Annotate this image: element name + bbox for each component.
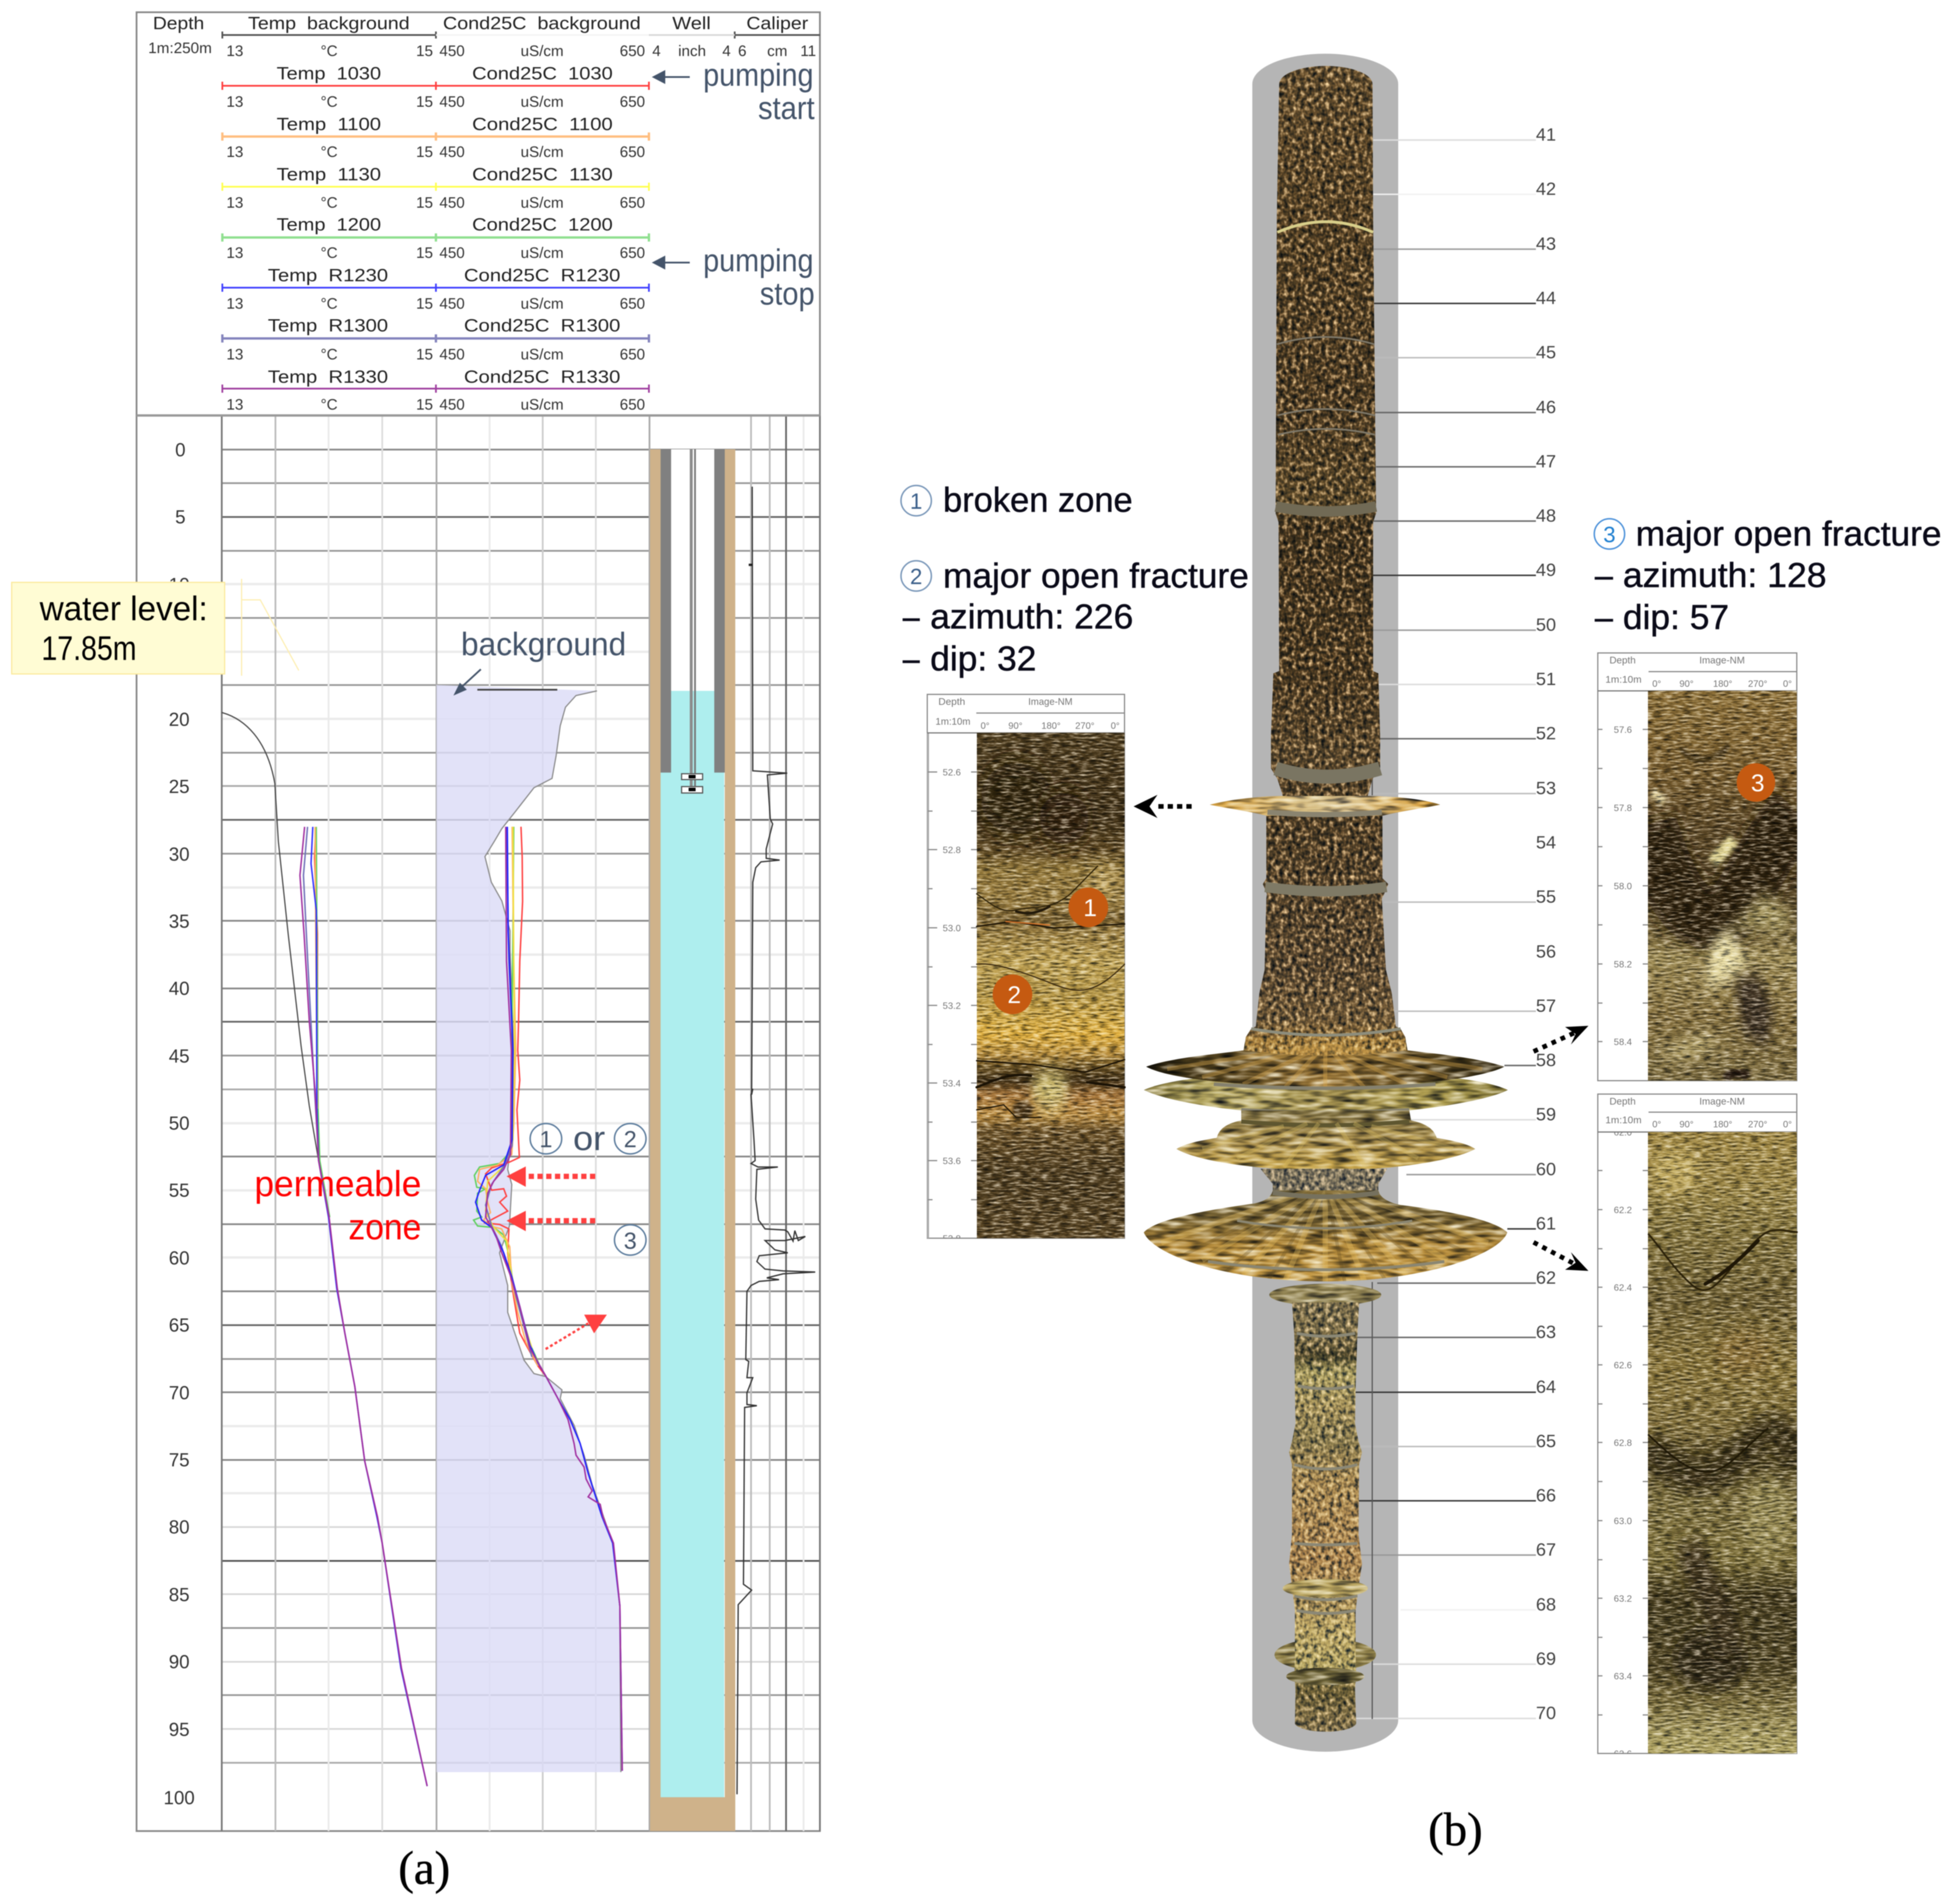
flange band [1245,1037,1406,1056]
depth ticks and labels [1598,725,1648,1047]
panel a: borehole log chart [12,12,820,1831]
legend: broken zone: 1 [910,490,923,514]
marker 2 [993,974,1032,1014]
annotation: 1 or 2: or [573,1120,605,1158]
header: scale rows and curve legend: 650 [620,295,645,312]
well diagram [650,449,735,1831]
televiewer image panel: 62.0 to 63.6 m [1598,1094,1797,1759]
header: scale rows and curve legend: uS/cm [521,143,564,160]
televiewer image panel: 57.6 to 58.4 m [1598,653,1797,1081]
background conductivity fill [437,685,621,1772]
borehole cylinder [1252,54,1398,1752]
header: scale rows and curve legend: 15 [416,93,433,110]
depth axis labels: 100 [163,1787,195,1808]
header: scale rows and curve legend [222,42,816,413]
disc at 53 m [1210,796,1440,816]
header: scale rows and curve legend: Temp 1200 [277,214,381,235]
header: scale rows and curve legend: 15 [416,396,433,413]
depth labels 41 to 70: 53 [1536,778,1556,798]
depth labels 41 to 70: 44 [1536,288,1556,308]
depth axis labels: 75 [169,1449,190,1470]
header: scale rows and curve legend: inch [678,42,706,60]
depth labels 41 to 70: 59 [1536,1104,1556,1124]
header: column titles: Well [672,13,711,33]
header: scale rows and curve legend: Cond25C 1200 [472,214,613,235]
header: scale rows and curve legend: uS/cm [521,194,564,211]
depth labels 41 to 70: 57 [1536,995,1556,1016]
annotation: 1 or 2: 1 [539,1127,553,1152]
depth axis labels: 35 [169,911,190,932]
header: scale rows and curve legend: Temp 1130 [277,164,381,184]
header: scale rows and curve legend: uS/cm [521,93,564,110]
header: scale rows and curve legend: 13 [226,93,243,110]
header: scale rows and curve legend: °C [320,244,338,261]
depth labels 41 to 70: 65 [1536,1431,1556,1451]
depth ticks and labels [1598,1128,1648,1759]
header: scale rows and curve legend: 450 [439,143,465,160]
image header text: 270° [1748,679,1768,689]
arrow: to image 52.6-53.8 m [1136,797,1194,816]
image header text: 90° [1008,721,1022,731]
header: scale rows and curve legend: Temp 1030 [277,63,381,83]
legend: fracture 3: 3 [1603,523,1616,547]
arrow: to image 62.0-63.6 m [1534,1242,1588,1271]
middle rock column [1244,811,1408,1050]
depth ticks and labels: 63.0 [1614,1517,1632,1526]
depth axis labels: 85 [169,1584,190,1605]
depth labels 41 to 70: 50 [1536,614,1556,635]
arrow: inflow lower [507,1211,596,1231]
legend: fracture 3 [1594,515,1941,637]
panel b: 3D borehole column [1144,54,1556,1752]
header: scale rows and curve legend: 4 [722,42,731,60]
header: column titles: 1m:250m [148,39,212,57]
depth axis labels: 50 [169,1113,190,1134]
header: scale rows and curve legend: 650 [620,244,645,261]
depth axis labels: 25 [169,776,190,797]
image header text: 90° [1679,679,1693,689]
header: scale rows and curve legend: 650 [620,42,645,60]
callout: pumping start: pumping [703,57,813,93]
flange at 69 m [1274,1639,1376,1671]
image header text: Depth [1609,655,1636,666]
label: permeable zone: permeable [254,1164,421,1204]
image frame [927,694,1125,1238]
marker 2: 2 [1007,981,1021,1008]
header: scale rows and curve legend: 15 [416,345,433,363]
header: scale rows and curve legend: 450 [439,194,465,211]
callout: water level: water level: [39,590,208,628]
image header text: 0° [1111,721,1120,731]
header: scale rows and curve legend: 13 [226,194,243,211]
depth labels 41 to 70: 43 [1536,233,1556,254]
header: scale rows and curve legend: 15 [416,194,433,211]
header: scale rows and curve legend: 450 [439,396,465,413]
depth ticks and labels: 53.0 [942,924,961,934]
image header text: Depth [938,696,965,707]
depth axis labels: 5 [175,506,186,527]
depth labels 41 to 70: 66 [1536,1485,1556,1505]
temperature background curve [222,712,427,1786]
callout: pumping start [652,57,815,126]
depth labels 41 to 70: 54 [1536,832,1556,853]
header: scale rows and curve legend: 13 [226,42,243,60]
header: scale rows and curve legend: 13 [226,244,243,261]
image header text: Image-NM [1028,696,1073,707]
callout: water level [12,579,299,676]
header: scale rows and curve legend: Cond25C 1030 [472,63,613,83]
arrow: outflow [546,1315,607,1349]
depth ticks and labels: 62.2 [1614,1206,1632,1215]
upper rock column [1271,66,1380,801]
well interior above water [661,449,725,691]
header: scale rows and curve legend: 450 [439,295,465,312]
header: scale rows and curve legend: uS/cm [521,295,564,312]
legend: fracture 2: major open fracture [943,557,1249,595]
depth ticks and labels: 63.6 [1614,1749,1632,1759]
depth axis labels: 55 [169,1180,190,1201]
depth labels 41 to 70: 48 [1536,505,1556,526]
label: permeable zone: zone [348,1207,421,1248]
header: scale rows and curve legend: °C [320,93,338,110]
header: scale rows and curve legend: Temp R1330 [268,366,388,387]
header: scale rows and curve legend: °C [320,345,338,363]
grey rings on lower column [1294,1333,1357,1613]
televiewer texture [1648,691,1797,1081]
image frame [1598,1094,1797,1753]
depth ticks and labels: 62.4 [1614,1283,1632,1293]
image header text: 270° [1748,1120,1768,1130]
legend: fracture 2: azimuth: 226 [930,598,1133,636]
marker 1: 1 [1083,894,1097,921]
depth ticks and labels: 63.2 [1614,1594,1632,1604]
header: scale rows and curve legend: cm [767,42,787,60]
legend: fracture 3: dip: 57 [1623,598,1729,637]
neck at 60 m [1260,1169,1387,1192]
header: scale rows and curve legend: 13 [226,143,243,160]
caliper curve [737,487,815,1794]
grey rings on upper column [1276,337,1380,777]
callout: pumping start: start [758,90,815,126]
arrow: inflow upper [507,1166,596,1187]
image header text: 180° [1041,721,1061,731]
header: scale rows and curve legend: 450 [439,244,465,261]
depth ticks and labels: 52.8 [942,846,961,855]
image header text: 180° [1713,679,1733,689]
legend: fracture 3: – [1595,598,1613,637]
depth axis labels [163,439,195,1808]
image header text: 0° [1783,1120,1792,1130]
depth labels 41 to 70: 70 [1536,1703,1556,1723]
image header text: 1m:10m [1605,1115,1642,1126]
depth ticks and labels: 62.6 [1614,1361,1632,1371]
background conductivity curve [485,691,621,1772]
depth labels 41 to 70: 47 [1536,451,1556,471]
depth labels 41 to 70: 41 [1536,124,1556,145]
well annulus: tan [650,449,735,1831]
depth labels 41 to 70: 62 [1536,1267,1556,1288]
depth labels 41 to 70: 52 [1536,723,1556,743]
depth labels 41 to 70: 49 [1536,560,1556,580]
header: column titles [148,13,820,57]
depth ticks and labels: 57.6 [1614,725,1632,735]
depth axis labels: 65 [169,1315,190,1336]
conductivity time-series curves [473,827,622,1771]
image header text [935,696,1125,731]
depth axis labels: 95 [169,1719,190,1740]
depth ticks and labels: 53.8 [942,1234,961,1244]
header: scale rows and curve legend: Temp R1300 [268,315,388,336]
header: scale rows and curve legend: Cond25C R1330 [464,366,620,387]
legend: fracture 3: major open fracture [1636,515,1941,553]
depth ticks and labels: 62.0 [1614,1128,1632,1138]
header: scale rows and curve legend: °C [320,194,338,211]
legend: broken zone: broken zone [943,481,1133,519]
image header text: Depth [1609,1096,1636,1107]
header: scale rows and curve legend: 4 [652,42,661,60]
header: scale rows and curve legend: 13 [226,295,243,312]
header: scale rows and curve legend: °C [320,396,338,413]
header: scale rows and curve legend: 11 [801,42,816,60]
depth ticks and labels [928,768,977,1244]
annotation: 1 or 2: 2 [624,1127,637,1152]
televiewer image panel: 52.6 to 53.8 m [927,694,1125,1244]
header: scale rows and curve legend: Cond25C 1130 [472,164,613,184]
annotation: 3 [614,1225,646,1255]
legend: fracture 2: dip: 32 [930,640,1036,678]
header: scale rows and curve legend: Cond25C R1230 [464,265,620,285]
depth labels 41 to 70: 42 [1536,179,1556,199]
caption b: (b) [1428,1804,1483,1856]
header: scale rows and curve legend: °C [320,42,338,60]
header: column titles: Caliper [746,13,808,33]
disc 2 at 58.5 m [1144,1075,1508,1112]
depth axis labels: 20 [169,709,190,730]
label: permeable zone [254,1164,421,1248]
flange at 69.5 m [1286,1668,1364,1685]
grey ring at 55 m [1265,887,1387,892]
header: column titles: Depth [153,13,204,33]
depth labels 41 to 70: 45 [1536,342,1556,362]
tick at 9 m on caliper [749,564,753,566]
callout: background [453,626,626,696]
depth labels 41 to 70 [1536,124,1556,1723]
image header text: Image-NM [1699,655,1745,666]
flange at 62.5 m [1269,1284,1381,1306]
televiewer texture [977,733,1125,1238]
header: column titles: Cond25C background [443,13,641,33]
header: scale rows and curve legend: Temp 1100 [277,114,381,134]
header: scale rows and curve legend: Cond25C 1100 [472,114,613,134]
header: scale rows and curve legend: uS/cm [521,42,564,60]
depth ticks and labels: 58.4 [1614,1037,1632,1047]
depth axis labels: 30 [169,844,190,865]
depth labels 41 to 70: 55 [1536,886,1556,907]
legend: fracture 3: – [1595,556,1613,595]
depth leader lines [1355,140,1536,1719]
fracture traces [1649,1230,1797,1472]
disc 3 at 59.5 m [1176,1110,1475,1171]
header: scale rows and curve legend: 15 [416,295,433,312]
depth axis labels: 45 [169,1046,190,1067]
depth ticks and labels: 53.6 [942,1157,961,1166]
callout: background: background [461,626,626,662]
header: scale rows and curve legend: 450 [439,345,465,363]
header: scale rows and curve legend: 650 [620,93,645,110]
header: scale rows and curve legend: 15 [416,42,433,60]
temperature time-series curves [300,827,427,1786]
image header text [1605,655,1797,689]
depth labels 41 to 70: 60 [1536,1159,1556,1179]
callout: pumping stop [652,242,815,312]
depth labels 41 to 70: 68 [1536,1594,1556,1615]
depth axis labels: 80 [169,1517,190,1538]
callout: pumping stop: stop [760,275,815,312]
legend: fracture 2: 2 [910,565,923,589]
plot grid [137,415,820,1831]
flange at 58 m [1251,1029,1401,1035]
header: scale rows and curve legend: 450 [439,42,465,60]
depth ticks and labels: 52.6 [942,768,961,778]
depth labels 41 to 70: 61 [1536,1213,1556,1234]
callout: water level: 17.85m [41,630,137,668]
legend: fracture 2: – [903,640,920,678]
depth labels 41 to 70: 56 [1536,941,1556,962]
depth axis labels: 70 [169,1382,190,1403]
marker 1 [1068,888,1108,927]
water column [661,691,724,1797]
packers [682,774,703,793]
annotation: 3: 3 [624,1228,637,1254]
header: scale rows and curve legend: 650 [620,194,645,211]
depth axis labels: 90 [169,1651,190,1672]
depth axis labels: 10 [169,574,190,595]
image frame [1598,653,1797,1081]
header: scale rows and curve legend: uS/cm [521,345,564,363]
header: scale rows and curve legend: uS/cm [521,244,564,261]
header: scale rows and curve legend: 15 [416,244,433,261]
depth labels 41 to 70: 67 [1536,1539,1556,1560]
depth ticks and labels: 57.8 [1614,803,1632,813]
casing [661,449,725,773]
header: scale rows and curve legend: Temp R1230 [268,265,388,285]
bright fracture ring at 43 m [1277,222,1373,232]
image header text: 270° [1075,721,1095,731]
image header text: 0° [980,721,990,731]
callout: pumping stop: pumping [703,242,813,278]
depth ticks and labels: 62.8 [1614,1438,1632,1448]
depth axis labels: 0 [175,439,186,460]
header: scale rows and curve legend: °C [320,295,338,312]
legend: fracture 2: – [903,598,920,636]
header: scale rows and curve legend: Cond25C R1300 [464,315,620,336]
header: column titles: Temp background [248,13,410,33]
header: scale rows and curve legend: 650 [620,396,645,413]
header: scale rows and curve legend: 6 [738,42,746,60]
image header text: 0° [1783,679,1792,689]
image header text: Image-NM [1699,1096,1745,1107]
image header text: 1m:10m [935,716,970,727]
depth ticks and labels: 53.4 [942,1079,961,1089]
depth ticks and labels: 63.4 [1614,1672,1632,1682]
image header text: 0° [1652,1120,1661,1130]
depth labels 41 to 70: 64 [1536,1377,1556,1397]
image header text [1605,1096,1797,1130]
depth ticks and labels: 58.2 [1614,960,1632,970]
disc 4 at 61 m [1144,1185,1507,1284]
lower rock column [1289,1302,1362,1732]
arrow: to image 57.6-58.4 m [1534,1026,1588,1051]
header: scale rows and curve legend: 15 [416,143,433,160]
depth axis labels: 40 [169,978,190,999]
header: scale rows and curve legend: °C [320,143,338,160]
header: scale rows and curve legend: 650 [620,345,645,363]
header: scale rows and curve legend: 650 [620,143,645,160]
header: scale rows and curve legend: 450 [439,93,465,110]
flange at 67.5 m [1283,1579,1368,1598]
image header text: 0° [1652,679,1661,689]
legend: fracture 2 [901,557,1249,678]
depth labels 41 to 70: 46 [1536,397,1556,417]
chart frame [137,12,820,1831]
depth labels 41 to 70: 58 [1536,1050,1556,1070]
depth labels 41 to 70: 51 [1536,669,1556,689]
depth axis labels: 60 [169,1248,190,1269]
televiewer texture [1648,1132,1797,1753]
depth labels 41 to 70: 63 [1536,1322,1556,1342]
image header text: 1m:10m [1605,674,1642,685]
fracture traces [977,866,1125,1117]
depth labels 41 to 70: 69 [1536,1648,1556,1669]
header: scale rows and curve legend: 13 [226,345,243,363]
image header text: 90° [1679,1120,1693,1130]
header: scale rows and curve legend: uS/cm [521,396,564,413]
header: scale rows and curve legend: 13 [226,396,243,413]
legend: fracture 3: azimuth: 128 [1623,556,1827,595]
measuring rod [690,449,693,794]
image header text: 180° [1713,1120,1733,1130]
annotation: 1 or 2 [530,1120,646,1158]
marker 3 [1737,763,1775,802]
depth ticks and labels: 58.0 [1614,882,1632,892]
depth ticks and labels: 53.2 [942,1001,961,1011]
caption a: (a) [399,1843,450,1894]
disc 1 at 58 m [1146,1037,1504,1089]
marker 3: 3 [1751,769,1765,796]
